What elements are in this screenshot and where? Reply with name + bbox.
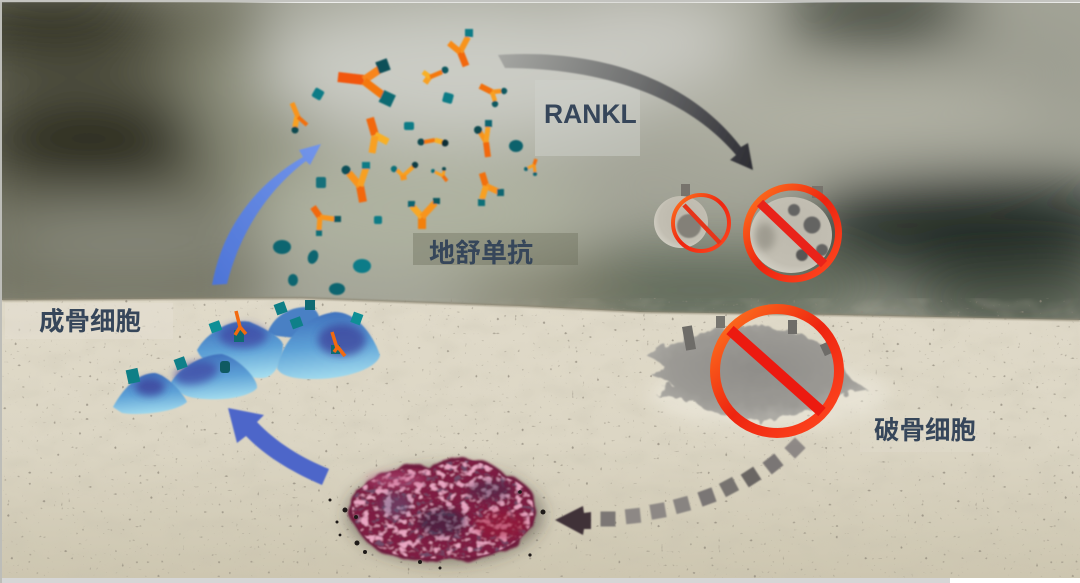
cell: medium osteoclast ball [750, 186, 832, 273]
label: osteoclast: 破骨细胞 [874, 417, 976, 445]
antibody 9 [342, 162, 370, 202]
antibody 6 [370, 118, 388, 153]
label background patches [5, 80, 990, 452]
free RANKL molecules [273, 87, 523, 295]
antibody 4 [480, 86, 507, 107]
antibody 5 [292, 103, 307, 134]
arrow: grey RANKL curved arrow [498, 54, 753, 170]
tumour: crimson mass [328, 458, 546, 570]
antibody 7 [418, 138, 448, 146]
arrow: blue curved arrow up to antibodies [212, 144, 321, 285]
arrow: dashed grey arrow from osteoclast to tumour [555, 437, 806, 535]
antibody 8 [474, 120, 492, 157]
osteoblast 2 [170, 354, 257, 399]
osteoblast back [267, 300, 320, 340]
antibody 3 [423, 66, 448, 83]
osteoblast 3 [197, 311, 283, 378]
prohibition sign: large [715, 309, 839, 433]
antibody 11 [431, 167, 447, 181]
antibody 12 [524, 159, 537, 176]
antibody 2 [449, 29, 473, 66]
label: RANKL: RANKL [544, 99, 637, 129]
cells: osteoblasts [113, 300, 380, 414]
osteoblast 1 [113, 368, 187, 414]
label: osteoblast: 成骨细胞 [39, 308, 141, 336]
antibody 13 [478, 173, 504, 206]
antibody 14 [313, 207, 341, 236]
prohibition sign: small [673, 195, 729, 251]
prohibition sign: medium [746, 187, 838, 279]
antibodies and free RANKL molecules [273, 29, 537, 295]
background: blurred grey-green sky [0, 0, 1080, 335]
arrow: blue arrow from tumour to osteoblasts [228, 408, 329, 485]
cell: osteoclast on bone [645, 316, 890, 429]
antibody 10 [391, 162, 418, 180]
cell: small osteoclast ball [654, 184, 708, 248]
osteoblast 4 large [277, 312, 380, 379]
antibody 15 [408, 198, 440, 229]
antibody 1 large [338, 58, 396, 107]
label: denosumab: 地舒单抗 [429, 238, 533, 268]
